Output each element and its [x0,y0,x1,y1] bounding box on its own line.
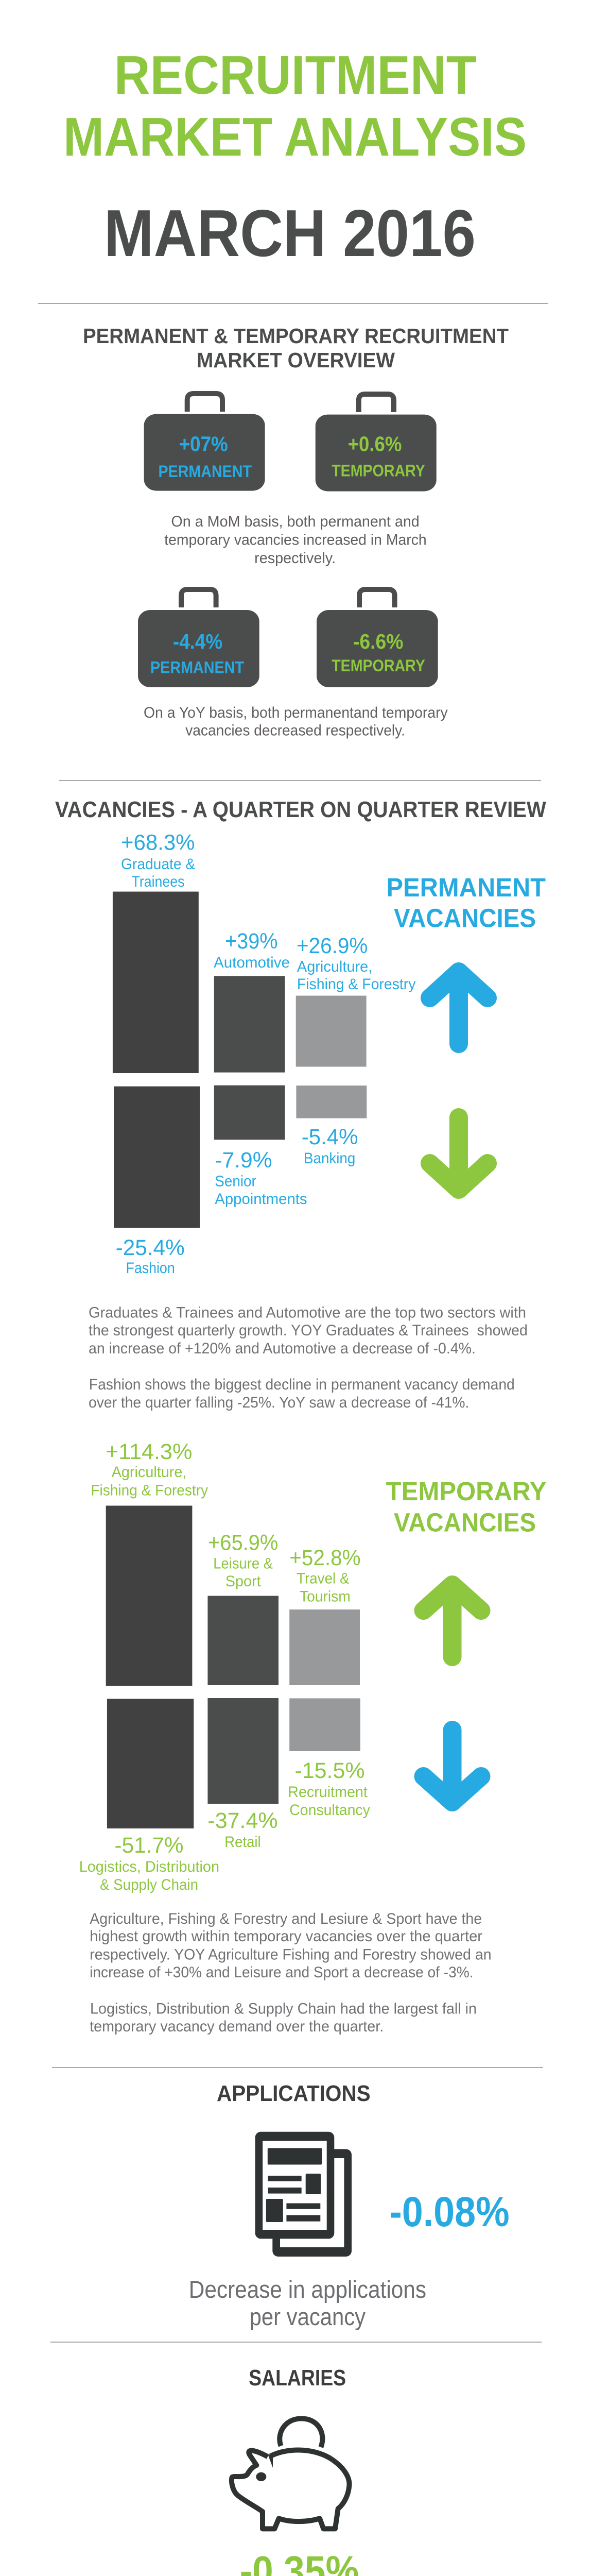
arrow: temporary up [423,1585,481,1657]
arrow: permanent down [430,1117,488,1190]
text: temporary commentary: increase of +30% and Leisure and Sport a decrease of -3%. [90,1964,473,1981]
icon: briefcase permanent MoM: +07% [179,432,228,455]
title: recruitment market analysis [63,45,527,167]
bar: banking: -5.4% [302,1125,358,1149]
bar: senior appointments [214,1086,307,1208]
bar: graduate and trainees: Trainees [132,873,184,890]
bar: logistics: Logistics, Distribution [79,1858,219,1875]
bar: graduate and trainees: Graduate & [121,856,195,873]
bar: recruitment consultancy: Consultancy [289,1802,370,1819]
icon: newspaper [255,2132,352,2257]
bar: logistics: & Supply Chain [100,1876,198,1893]
icon: briefcase permanent YoY: PERMANENT [150,658,244,677]
text: permanent commentary: over the quarter falling -25%. YoY saw a decrease of -41%. [89,1394,469,1411]
bar: agriculture: Fishing & Forestry [297,976,416,993]
text: MoM summary [164,513,427,567]
heading: temporary vacancies [386,1477,547,1537]
text: temporary commentary: highest growth within temporary vacancies over the quarter [90,1928,482,1945]
bar: banking [296,1086,367,1167]
icon: briefcase temporary YoY: TEMPORARY [332,656,425,675]
icon: briefcase temporary YoY: -6.6% [353,630,403,653]
heading: vacancies quarter on quarter: VACANCIES - A QUARTER ON QUARTER REVIEW [55,798,547,822]
text: temporary commentary: temporary vacancy demand over the quarter. [90,2018,384,2035]
bar: automotive: +39% [225,929,278,954]
bar: travel and tourism: Tourism [300,1588,351,1605]
stat: applications change: -0.08% [389,2189,510,2235]
text: temporary commentary: respectively. YOY Agriculture Fishing and Forestry showed an [90,1946,492,1963]
bar: leisure and sport: Sport [225,1573,261,1590]
heading: permanent vacancies [386,873,546,933]
chart: temporary vacancies [79,1439,370,1893]
bar: banking: Banking [304,1150,355,1167]
bar: senior appointments: Appointments [215,1191,307,1208]
bar: agriculture: +26.9% [297,934,368,958]
bar: graduate and trainees [113,831,199,1073]
bar: leisure and sport: +65.9% [208,1531,278,1555]
arrow: temporary down [423,1730,481,1802]
bar: logistics: -51.7% [114,1833,183,1858]
text: MoM summary: On a MoM basis, both permanent and [171,513,420,530]
title: recruitment market analysis: RECRUITMENT [114,45,477,106]
text: permanent commentary: Fashion shows the biggest decline in permanent vacancy demand [89,1376,515,1393]
chart: permanent vacancies [113,831,415,1277]
heading: permanent vacancies: VACANCIES [394,904,536,933]
heading: market overview [83,324,509,372]
icon: briefcase temporary MoM [316,394,437,492]
text: temporary commentary: Logistics, Distribution & Supply Chain had the largest fall in [90,2001,477,2018]
bar: agriculture temp: Agriculture, [112,1464,186,1481]
text: MoM summary: temporary vacancies increased in March [164,532,427,548]
icon: briefcase permanent YoY [138,589,259,687]
heading: salaries: SALARIES [249,2366,346,2391]
text: permanent commentary: Graduates & Trainees and Automotive are the top two sectors with [89,1304,526,1321]
icon: briefcase permanent MoM [144,394,265,491]
bar: retail: -37.4% [207,1808,278,1833]
text: permanent commentary [89,1304,528,1411]
bar: senior appointments: -7.9% [215,1148,272,1173]
icon: piggy bank [232,2418,350,2529]
bar: recruitment consultancy: -15.5% [294,1758,364,1783]
bar: graduate and trainees: +68.3% [121,831,195,855]
heading: applications: APPLICATIONS [217,2081,371,2106]
bar: agriculture temp [91,1439,208,1686]
text: temporary commentary: Agriculture, Fishing & Forestry and Lesiure & Sport have the [90,1910,482,1927]
heading: march 2016: MARCH 2016 [104,196,476,270]
bar: automotive: Automotive [214,954,290,971]
arrow: permanent up [430,972,488,1044]
bar: travel and tourism: Travel & [297,1570,349,1587]
text: applications caption: per vacancy [250,2303,366,2330]
bar: leisure and sport [207,1531,279,1685]
heading: temporary vacancies: TEMPORARY [386,1477,547,1506]
bar: fashion: -25.4% [116,1235,185,1260]
bar: senior appointments: Senior [215,1173,256,1190]
bar: travel and tourism: +52.8% [289,1546,361,1570]
text: temporary commentary [90,1910,492,2035]
heading: temporary vacancies: VACANCIES [394,1507,536,1537]
heading: permanent vacancies: PERMANENT [386,873,546,902]
bar: logistics [79,1699,219,1893]
bar: retail: Retail [224,1834,261,1851]
icon: briefcase temporary MoM: +0.6% [348,432,402,455]
bar: retail [207,1698,279,1851]
heading: market overview: MARKET OVERVIEW [197,348,395,372]
icon: briefcase permanent YoY: -4.4% [173,630,222,653]
bar: agriculture: Agriculture, [297,958,372,975]
text: MoM summary: respectively. [254,550,336,567]
text: applications caption: Decrease in applications [189,2276,426,2303]
icon: briefcase permanent MoM: PERMANENT [159,462,252,481]
text: YoY summary [144,704,448,739]
icon: briefcase temporary MoM: TEMPORARY [332,462,425,480]
bar: agriculture temp: Fishing & Forestry [91,1482,208,1499]
bar: fashion [114,1087,200,1277]
bar: recruitment consultancy: Recruitment [288,1784,368,1801]
bar: agriculture temp: +114.3% [106,1439,192,1464]
bar: fashion: Fashion [126,1260,175,1277]
text: YoY summary: On a YoY basis, both permanentand temporary [144,704,448,721]
text: YoY summary: vacancies decreased respectively. [185,722,405,739]
icon: briefcase temporary YoY [317,589,438,687]
text: permanent commentary: the strongest quarterly growth. YOY Graduates & Trainees showed [89,1322,528,1339]
heading: market overview: PERMANENT & TEMPORARY RECRUITMENT [83,324,509,348]
title: recruitment market analysis: MARKET ANALYSIS [63,107,527,167]
bar: travel and tourism [289,1546,361,1685]
text: applications caption [189,2276,426,2330]
bar: recruitment consultancy [288,1698,370,1819]
bar: agriculture [296,934,416,1066]
text: permanent commentary: an increase of +120% and Automotive a decrease of -0.4%. [89,1340,476,1357]
bar: automotive [214,929,290,1073]
bar: leisure and sport: Leisure & [213,1555,273,1572]
